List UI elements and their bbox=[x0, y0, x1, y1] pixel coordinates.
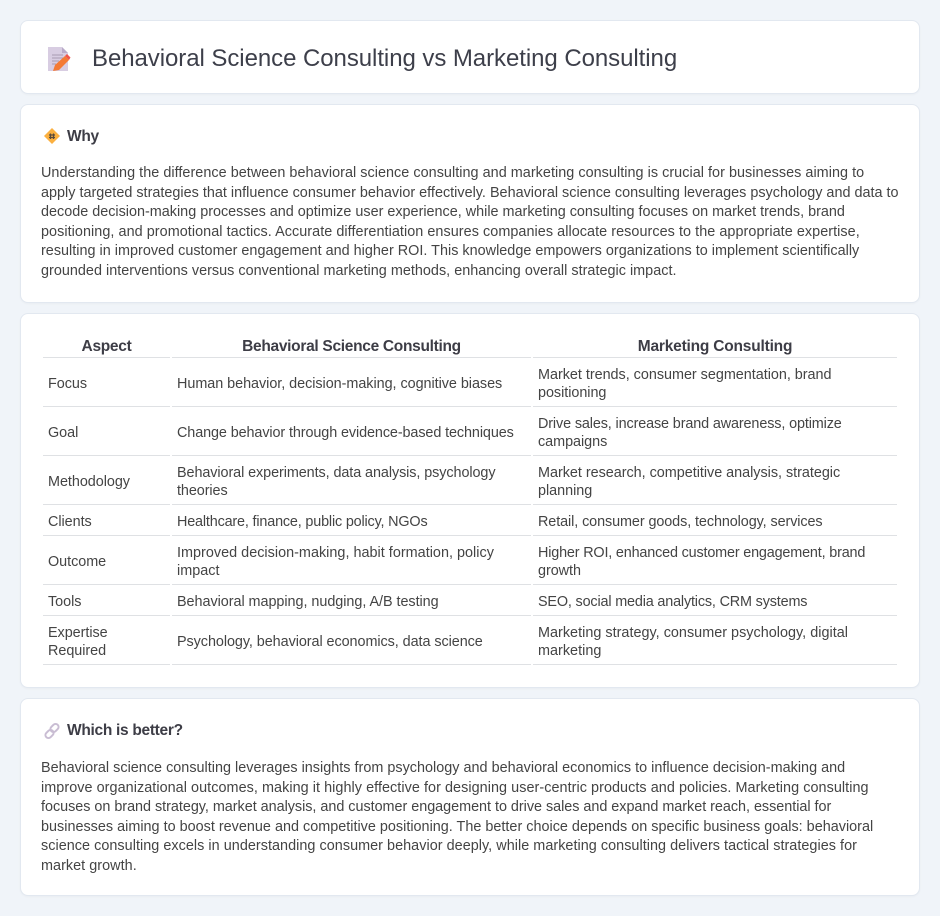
row: expertise required bbox=[48, 625, 108, 659]
text block: which is better: market growth. bbox=[41, 858, 137, 874]
tools: behavioral: Behavioral mapping, nudging, A/B testing bbox=[177, 594, 439, 610]
row: clients: Clients bbox=[48, 514, 92, 530]
icon: orange diamond bbox=[44, 128, 60, 144]
text block: which is better: focuses on brand strategy, market analysis, and customer engagement to drive sales and expand market reach, essential for bbox=[41, 799, 831, 815]
text block: why bbox=[41, 165, 899, 279]
text block: which is better: improve organizational outcomes, making it highly effective for designing user-centric products and policies. Marketing consulting bbox=[41, 780, 869, 796]
methodology: behavioral bbox=[177, 465, 496, 499]
clients: marketing: Retail, consumer goods, technology, services bbox=[538, 514, 823, 530]
panel: which is better bbox=[20, 698, 920, 896]
panel: header bbox=[20, 20, 920, 94]
title: Behavioral Science Consulting vs Marketing Consulting bbox=[92, 45, 677, 72]
row: goal: Goal bbox=[48, 425, 78, 441]
goal: marketing: Drive sales, increase brand awareness, optimize bbox=[538, 416, 842, 432]
row: expertise required: Expertise bbox=[48, 625, 108, 641]
text block: which is better: businesses aiming to boost revenue and competitive positioning. The better choice depends on specific business goals: behavioral bbox=[41, 819, 873, 835]
methodology: marketing: planning bbox=[538, 483, 592, 499]
text block: which is better bbox=[41, 760, 873, 874]
methodology: marketing: Market research, competitive analysis, strategic bbox=[538, 465, 840, 481]
panel: why bbox=[20, 104, 920, 303]
icon: document with pencil bbox=[48, 47, 70, 71]
heading: why: Why bbox=[67, 128, 99, 145]
text block: why: apply targeted strategies that influence consumer behavior effectively. Behavioral science consulting leverages psychology and data to bbox=[41, 185, 899, 201]
table header: aspect: Aspect bbox=[82, 338, 131, 355]
methodology: behavioral: theories bbox=[177, 483, 228, 499]
row: tools: Tools bbox=[48, 594, 81, 610]
focus: marketing: positioning bbox=[538, 385, 606, 401]
goal: behavioral: Change behavior through evidence-based techniques bbox=[177, 425, 514, 441]
methodology: marketing bbox=[538, 465, 840, 499]
tools: marketing: SEO, social media analytics, CRM systems bbox=[538, 594, 807, 610]
row: expertise required: Required bbox=[48, 643, 106, 659]
text block: why: decode decision-making processes and optimize user experience, while marketing consulting focuses on market trends, brand bbox=[41, 204, 845, 220]
text block: which is better: Behavioral science consulting leverages insights from psychology and behavioral economics to influence decision-making and bbox=[41, 760, 845, 776]
expertise: marketing: Marketing strategy, consumer psychology, digital bbox=[538, 625, 848, 641]
outcome: marketing: growth bbox=[538, 563, 581, 579]
row: focus: Focus bbox=[48, 376, 87, 392]
text block: why: positioning, and promotional tactics. Accurate differentiation ensures companies allocate resources to the appropriate expertise, bbox=[41, 224, 860, 240]
row: methodology: Methodology bbox=[48, 474, 130, 490]
heading: which is better: Which is better? bbox=[67, 722, 183, 739]
text block: which is better: science consulting excels in understanding consumer behavior deeply, while marketing consulting delivers tactical strategies for bbox=[41, 838, 857, 854]
text block: why: resulting in improved customer engagement and higher ROI. This knowledge empowers organizations to implement scientifically bbox=[41, 243, 859, 259]
focus: marketing: Market trends, consumer segmentation, brand bbox=[538, 367, 832, 383]
table header: behavioral science consulting: Behavioral Science Consulting bbox=[242, 338, 461, 355]
outcome: marketing: Higher ROI, enhanced customer engagement, brand bbox=[538, 545, 865, 561]
expertise: marketing: marketing bbox=[538, 643, 601, 659]
outcome: behavioral bbox=[177, 545, 494, 579]
methodology: behavioral: Behavioral experiments, data analysis, psychology bbox=[177, 465, 495, 481]
outcome: marketing bbox=[538, 545, 865, 579]
expertise: marketing bbox=[538, 625, 848, 659]
text block: why: grounded interventions versus conventional marketing methods, enhancing overall strategic impact. bbox=[41, 263, 676, 279]
text block: why: Understanding the difference between behavioral science consulting and marketing consulting is crucial for businesses aiming to bbox=[41, 165, 864, 181]
focus: behavioral: Human behavior, decision-making, cognitive biases bbox=[177, 376, 502, 392]
row: outcome: Outcome bbox=[48, 554, 106, 570]
outcome: behavioral: impact bbox=[177, 563, 220, 579]
goal: marketing bbox=[538, 416, 842, 450]
panel: comparison table bbox=[20, 313, 920, 688]
outcome: behavioral: Improved decision-making, habit formation, policy bbox=[177, 545, 494, 561]
focus: marketing bbox=[538, 367, 832, 401]
expertise: behavioral: Psychology, behavioral economics, data science bbox=[177, 634, 483, 650]
table header: marketing consulting: Marketing Consulting bbox=[638, 338, 792, 355]
clients: behavioral: Healthcare, finance, public policy, NGOs bbox=[177, 514, 427, 530]
goal: marketing: campaigns bbox=[538, 434, 607, 450]
icon: chain link bbox=[44, 723, 60, 739]
